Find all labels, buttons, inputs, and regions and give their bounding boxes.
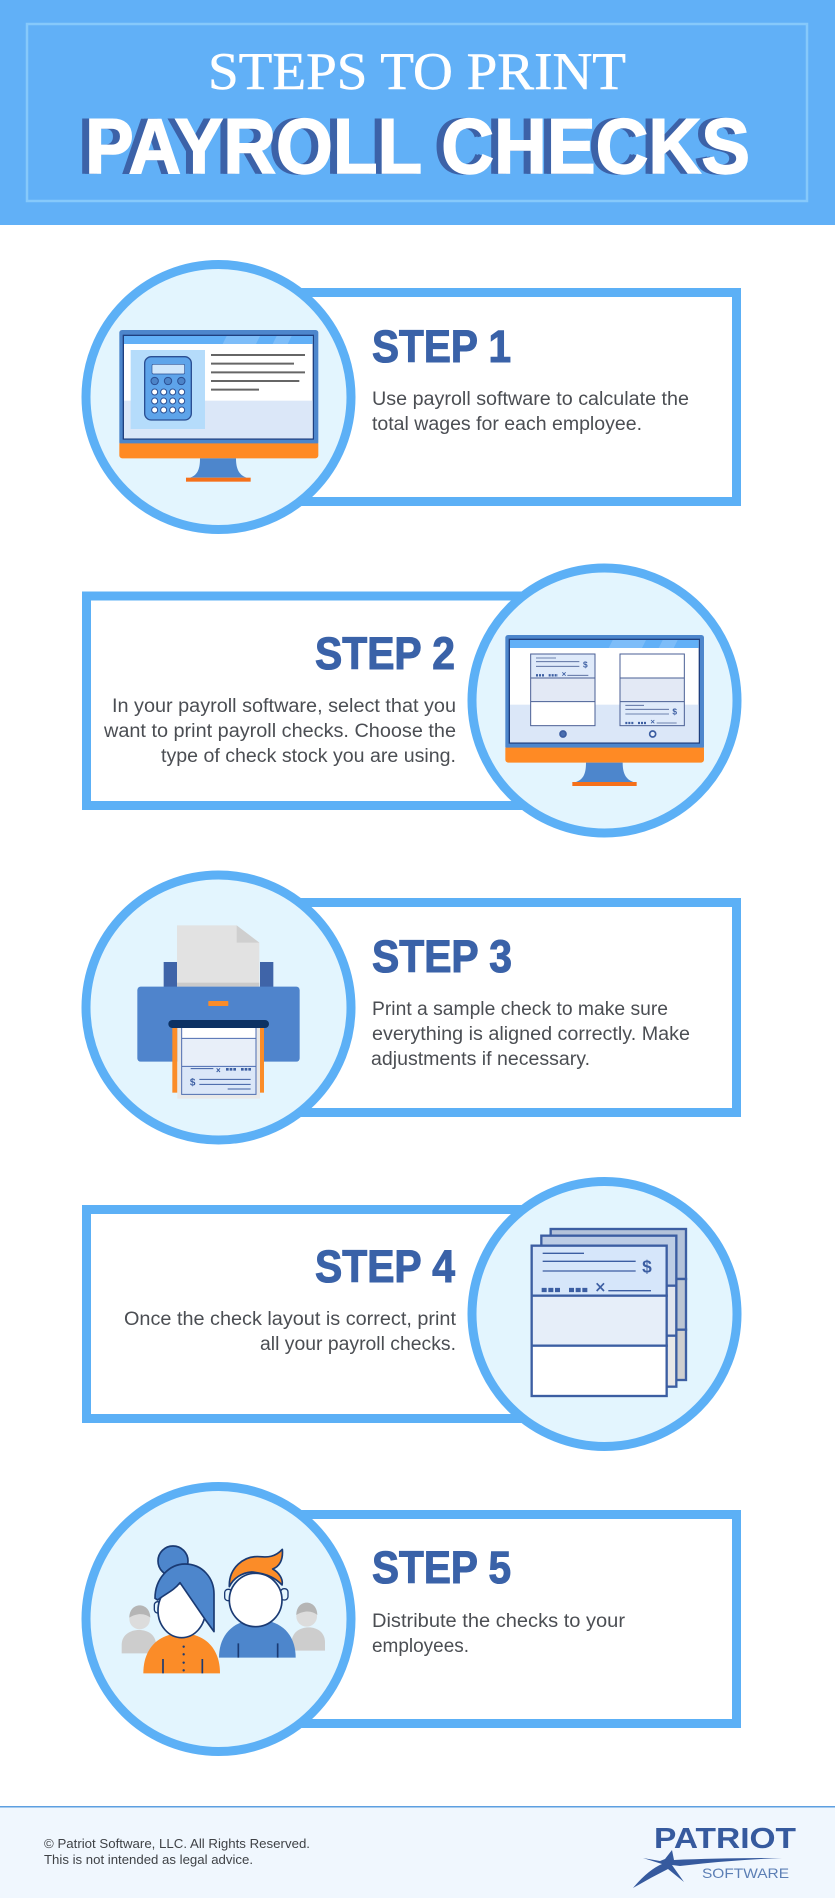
logo: patriot software: SOFTWARE <box>702 1865 789 1881</box>
panel: step 1 <box>86 264 736 530</box>
radio buttons <box>560 731 656 737</box>
step 3 text: Print a sample check to make sure <box>372 999 668 1020</box>
step 5 text: employees. <box>372 1636 469 1657</box>
title line: payroll checks: PAYROLL CHECKS <box>78 102 743 190</box>
left check option <box>531 654 595 726</box>
panel: step 3 <box>86 875 736 1140</box>
man <box>219 1549 296 1658</box>
panel: step 2 <box>86 568 737 833</box>
step 5 text: Distribute the checks to your <box>372 1611 626 1632</box>
copyright text <box>44 1836 310 1867</box>
step 4 text <box>124 1309 457 1355</box>
background employee left <box>122 1605 156 1653</box>
step 1 text: total wages for each employee. <box>372 414 642 435</box>
title line: steps to print: STEPS TO PRINT <box>208 43 626 101</box>
icon: monitor with calculator <box>119 330 318 482</box>
middle check <box>541 1236 676 1387</box>
step 2 heading: STEP 2 <box>315 628 455 679</box>
panel: step 5 <box>86 1486 736 1752</box>
left check option: $ <box>583 659 588 669</box>
title line: payroll checks: PAYROLL CHECKS <box>81 102 746 190</box>
step 5 text <box>372 1611 626 1657</box>
step 2 text: type of check stock you are using. <box>161 746 456 767</box>
icon: printer with check: $ <box>190 1077 196 1088</box>
logo: patriot software <box>633 1823 796 1888</box>
step 3 text: adjustments if necessary. <box>371 1049 590 1070</box>
step 1 text <box>372 389 689 435</box>
step 4 text: Once the check layout is correct, print <box>124 1309 457 1330</box>
step 4 text: all your payroll checks. <box>260 1334 456 1355</box>
icon: employees <box>122 1546 325 1673</box>
header banner <box>0 0 835 225</box>
icon: stack of checks: $ <box>642 1257 652 1277</box>
panel: step 4 <box>86 1182 737 1446</box>
step 5 heading: STEP 5 <box>372 1542 511 1593</box>
step 2 text <box>103 696 456 767</box>
front check <box>532 1246 667 1396</box>
step 1 heading: STEP 1 <box>372 321 511 372</box>
step 3 heading: STEP 3 <box>372 931 512 982</box>
step 2 text: want to print payroll checks. Choose the <box>103 721 456 742</box>
back check <box>551 1229 686 1380</box>
step 1 text: Use payroll software to calculate the <box>372 389 689 410</box>
step 3 text: everything is aligned correctly. Make <box>372 1024 690 1045</box>
copyright text: © Patriot Software, LLC. All Rights Reserved. <box>44 1836 310 1851</box>
right check option <box>620 654 684 726</box>
step 2 text: In your payroll software, select that you <box>112 696 456 717</box>
icon: stack of checks <box>532 1229 686 1396</box>
step 3 text <box>371 999 690 1070</box>
background employee right <box>292 1603 325 1651</box>
footer <box>0 1806 835 1898</box>
copyright text: This is not intended as legal advice. <box>44 1852 253 1867</box>
right check option: $ <box>672 707 677 717</box>
icon: printer with check <box>137 925 300 1099</box>
step 4 heading: STEP 4 <box>315 1241 455 1292</box>
woman <box>143 1546 220 1673</box>
logo: patriot software: PATRIOT <box>654 1823 796 1855</box>
icon: monitor with check layouts <box>505 635 704 786</box>
title line: payroll checks: PAYROLL CHECKS <box>85 102 750 190</box>
